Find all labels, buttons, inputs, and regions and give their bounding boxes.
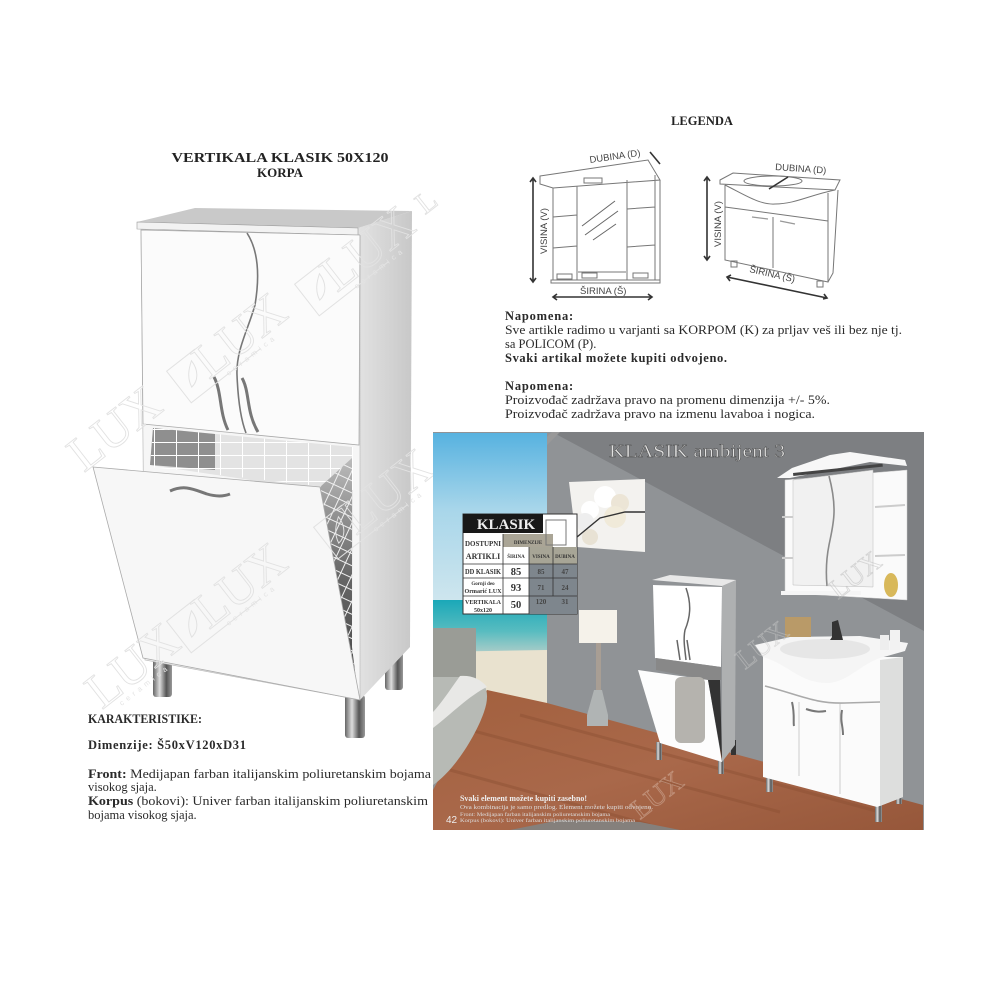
small laundry cabinet bbox=[638, 575, 736, 774]
legend diagram: sink cabinet bbox=[704, 162, 840, 299]
fine print and page number: Front: Medijapan farban italijanskim poliuretanskim bojama bbox=[460, 811, 611, 818]
legend heading: LEGENDA bbox=[671, 114, 733, 128]
dimensions table: DD KLASIK bbox=[465, 567, 501, 576]
watermarks: LUX ceramica: ceramica bbox=[371, 488, 426, 534]
watermarks: LUX ceramica: LUX bbox=[56, 374, 172, 482]
fine print and page number: Ova kombinacija je samo predlog. Element možete kupiti odvojeno. bbox=[460, 805, 654, 811]
characteristics text: KARAKTERISTIKE: bbox=[88, 712, 202, 726]
dimensions table: 50 bbox=[511, 600, 521, 611]
watermarks: LUX ceramica: LUX bbox=[309, 194, 425, 302]
product title: VERTIKALA KLASIK 50X120 bbox=[172, 150, 389, 165]
dimensions table: 93 bbox=[511, 583, 521, 594]
dimensions table: 85 bbox=[538, 568, 545, 576]
product title bbox=[172, 150, 389, 180]
fine print and page number bbox=[446, 794, 654, 826]
legs bbox=[153, 650, 403, 738]
photo watermarks bbox=[625, 546, 888, 826]
watermarks: LUX ceramica: ceramica bbox=[224, 582, 279, 628]
top slab bbox=[137, 208, 412, 235]
watermarks: LUX ceramica: LUX bbox=[74, 611, 190, 719]
dimensions table: 71 bbox=[538, 584, 545, 592]
characteristics text: bojama visokog sjaja. bbox=[88, 808, 197, 822]
dimensions table: 50x120 bbox=[474, 608, 492, 614]
dimensions table: VISINA bbox=[532, 555, 550, 560]
vanity with sink bbox=[755, 617, 908, 822]
watermarks: LUX ceramica: ceramica bbox=[224, 332, 279, 378]
fine print and page number: Korpus (bokovi): Univer farban italijanskim poliuretanskim bojama bbox=[460, 817, 636, 824]
characteristics text bbox=[88, 712, 431, 822]
product title: KORPA bbox=[257, 165, 304, 180]
dimensions table: 31 bbox=[562, 598, 569, 606]
wall and window scene bbox=[433, 432, 924, 830]
floor lamp bbox=[579, 610, 617, 726]
photo watermarks: LUX bbox=[823, 546, 888, 606]
note text: napomena: Sve artikle radimo u varjanti sa KORPOM (K) za prljav veš ili bez nje tj. bbox=[505, 323, 902, 337]
basket interior bbox=[150, 428, 358, 695]
fine print and page number: 42 bbox=[446, 815, 458, 826]
note text: napomena bbox=[505, 309, 902, 421]
dimensions table: 47 bbox=[562, 568, 569, 576]
watermarks: LUX ceramica bbox=[56, 183, 444, 719]
legend diagram: mirror cabinet bbox=[530, 148, 660, 300]
fine print and page number: Svaki element možete kupiti zasebno! bbox=[460, 794, 587, 803]
note text: napomena: Napomena: bbox=[505, 379, 574, 393]
dimensions table: 85 bbox=[511, 567, 521, 578]
characteristics text: Dimenzije: Š50xV120xD31 bbox=[88, 738, 246, 752]
characteristics text: Front: Medijapan farban italijanskim poliuretanskim bojama bbox=[88, 767, 431, 781]
mirror cabinet bbox=[777, 452, 907, 600]
carcass bbox=[141, 230, 360, 700]
note text: napomena: Proizvođač zadržava pravo na promenu dimenzija +/- 5%. bbox=[505, 393, 830, 407]
watermarks: LUX ceramica: LUX bbox=[328, 437, 444, 545]
note text: napomena: Napomena: bbox=[505, 309, 574, 323]
legend diagram: sink cabinet: VISINA (V) bbox=[713, 201, 724, 247]
photo watermarks: LUX bbox=[730, 616, 795, 676]
bathtub bbox=[433, 676, 487, 785]
dimensions table: DOSTUPNI bbox=[465, 539, 501, 548]
dimensions table: Ormarić LUX bbox=[464, 589, 502, 595]
note text: napomena: Proizvođač zadržava pravo na izmenu lavaboa i nogica. bbox=[505, 407, 815, 421]
dimensions table: 120 bbox=[536, 598, 547, 606]
characteristics text: Korpus (bokovi): Univer farban italijanskim poliuretanskim bbox=[88, 794, 428, 808]
product photo: laundry cabinet bbox=[93, 208, 412, 738]
dimensions table: DIMENZIJE bbox=[514, 541, 543, 546]
legend diagram: mirror cabinet: ŠIRINA (Š) bbox=[580, 286, 626, 297]
watermarks: LUX ceramica: L bbox=[409, 183, 444, 221]
note text: napomena: sa POLICOM (P). bbox=[505, 337, 596, 351]
cabinet side bbox=[358, 211, 412, 700]
dimensions table: ŠIRINA bbox=[507, 554, 525, 560]
dimensions table: DUBINA bbox=[555, 555, 575, 560]
dimensions table: ARTIKLI bbox=[466, 552, 500, 561]
watermarks: LUX ceramica: LUX bbox=[181, 531, 297, 639]
photo watermarks: LUX bbox=[625, 766, 690, 826]
legend diagram: mirror cabinet: VISINA (V) bbox=[539, 208, 550, 254]
watermarks: LUX ceramica: ceramica bbox=[117, 662, 172, 708]
orchid wall art bbox=[569, 479, 645, 552]
watermarks: LUX ceramica: LUX bbox=[181, 281, 297, 389]
dimensions table: 24 bbox=[562, 584, 569, 592]
panel: ambience photo bbox=[433, 432, 924, 830]
dimensions table: VERTIKALA bbox=[465, 599, 501, 606]
legend diagram: mirror cabinet: DUBINA (D) bbox=[589, 148, 641, 166]
upper doors bbox=[141, 230, 360, 445]
watermarks: LUX ceramica: ceramica bbox=[352, 245, 407, 291]
wood floor bbox=[433, 690, 923, 830]
legend diagram: sink cabinet: ŠIRINA (Š) bbox=[748, 264, 796, 285]
legend diagram: sink cabinet: DUBINA (D) bbox=[775, 162, 827, 177]
characteristics text: visokog sjaja. bbox=[88, 780, 157, 794]
tilted front flap bbox=[93, 467, 360, 700]
dimensions table: Gornji deo bbox=[471, 582, 495, 587]
note text: napomena: Svaki artikal možete kupiti odvojeno. bbox=[505, 351, 727, 365]
ambience title: KLASIK ambijent 3 bbox=[609, 441, 785, 461]
dimensions table bbox=[463, 514, 577, 614]
dimensions table: KLASIK bbox=[477, 517, 536, 533]
